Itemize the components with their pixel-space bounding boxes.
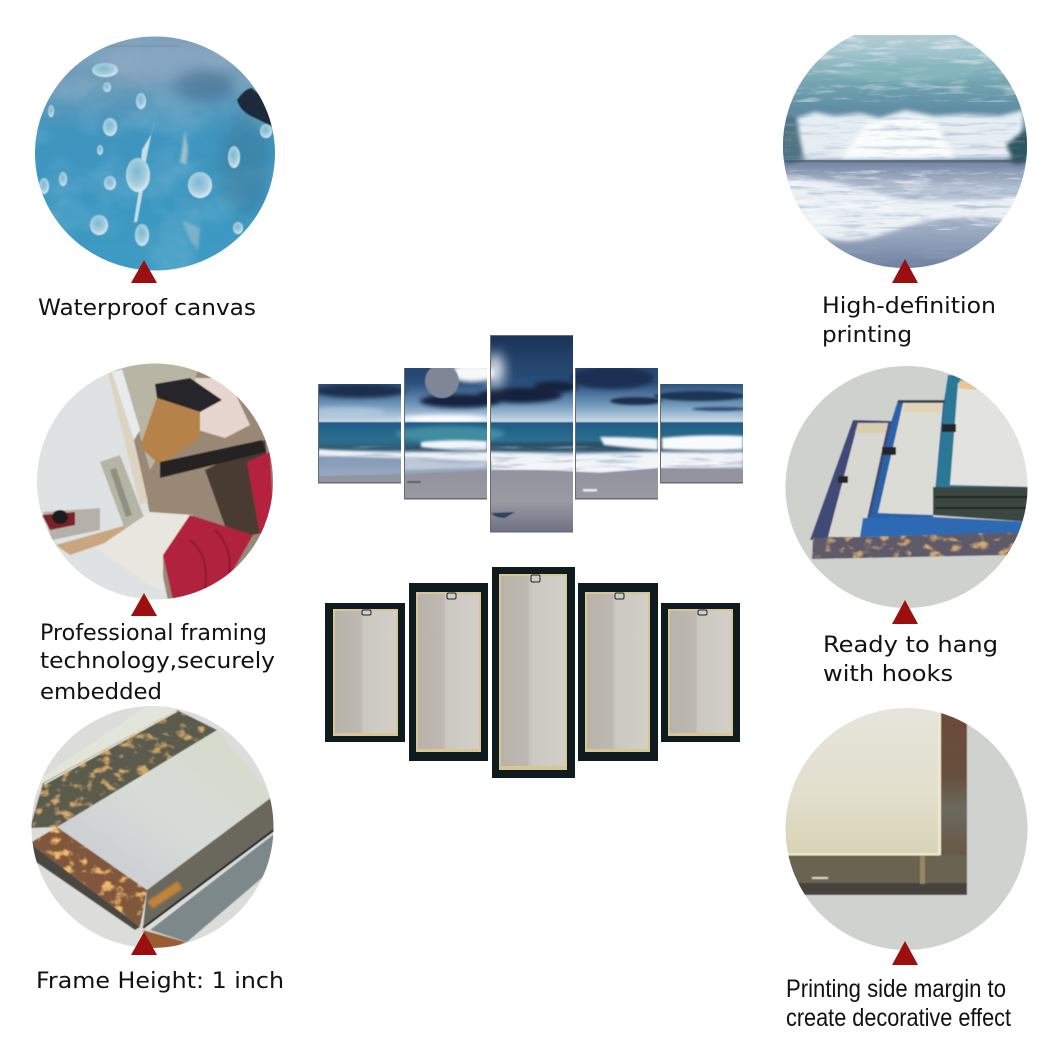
photo: stacked frames with hooks — [780, 360, 1035, 612]
canvas panel 3 — [491, 336, 573, 531]
label: technology securely: technology,securely — [40, 648, 275, 674]
back frame 3 — [492, 567, 575, 778]
five-panel seascape front view — [318, 335, 743, 532]
canvas panel 5 — [661, 384, 743, 482]
panel shadows — [318, 335, 743, 532]
back frame 1 — [325, 603, 405, 742]
panel: waterproof canvas — [30, 30, 280, 321]
icon: red triangle pointer — [892, 259, 918, 283]
label: create decorative effect: create decorative effect — [786, 1004, 1011, 1032]
label: printing side margin to: Printing side margin to — [786, 975, 1006, 1003]
photo: breaking wave close-up — [776, 30, 1032, 270]
label: waterproof canvas: Waterproof canvas — [38, 295, 256, 321]
panel: high-definition printing — [776, 30, 1032, 348]
label: embedded: embedded — [40, 679, 162, 705]
back frame 2 — [409, 583, 488, 761]
photo: water drops on blue canvas — [30, 30, 280, 275]
photo: frame corner close-up — [28, 700, 278, 952]
icon: red triangle pointer — [131, 932, 157, 955]
canvas panel 4 — [576, 368, 658, 498]
label: professional framing: Professional framing — [40, 620, 267, 646]
panel: professional framing — [30, 360, 280, 705]
five-panel back view with hooks — [325, 567, 740, 778]
icon: red triangle pointer — [131, 593, 157, 616]
label: printing: printing — [822, 322, 912, 348]
canvas panel 1 — [319, 384, 401, 482]
label: ready to hang: Ready to hang — [823, 632, 998, 658]
icon: red triangle pointer — [131, 260, 157, 283]
panel: ready to hang — [780, 360, 1035, 687]
back frame 5 — [661, 603, 740, 742]
panel: frame height — [28, 700, 284, 994]
canvas panel 2 — [405, 368, 487, 498]
photo: hands with nail gun and hammer — [37, 364, 273, 600]
panel: printing side margin — [780, 700, 1032, 1032]
label: frame height: Frame Height: 1 inch — [36, 968, 284, 994]
photo: printed side margin corner — [780, 700, 1032, 955]
label: with hooks: with hooks — [823, 661, 953, 687]
icon: red triangle pointer — [892, 941, 918, 965]
back frame 4 — [578, 583, 658, 761]
icon: red triangle pointer — [892, 600, 918, 624]
label: high-definition: High-definition — [822, 293, 996, 319]
